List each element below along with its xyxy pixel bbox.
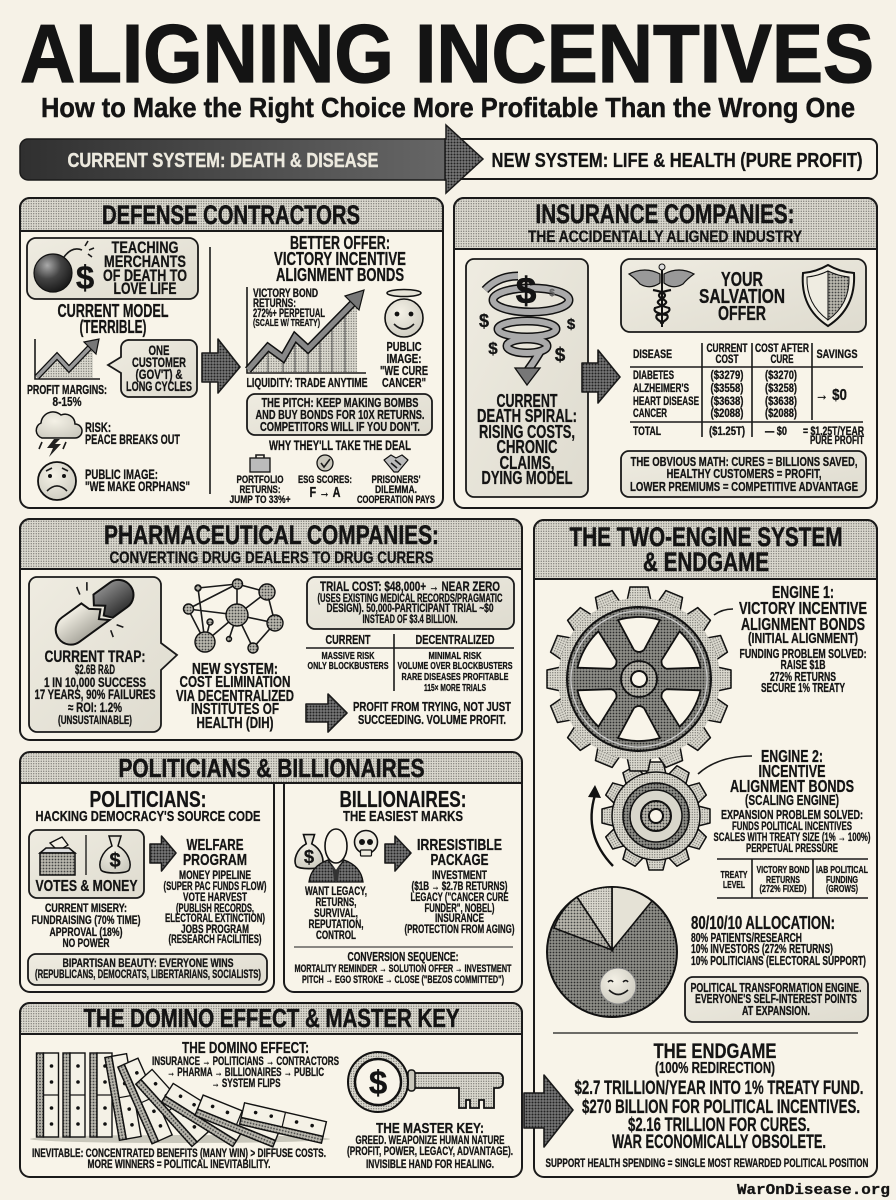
table: disease cost savings: ($3638)	[765, 396, 797, 408]
panel: your salvation offer: YOUR	[721, 269, 763, 291]
callout: trial cost: (USES EXISTING MEDICAL RECORDS/PRAGMATIC	[318, 593, 502, 605]
icon: master key	[348, 1052, 503, 1112]
icon: engine 2 gear	[602, 762, 710, 870]
text: engine 1	[714, 582, 867, 695]
chart: 80/10/10 allocation pie	[547, 887, 677, 1017]
icon: halo smiley with public image	[380, 290, 428, 390]
text: irresistible package: INSURANCE	[435, 913, 484, 925]
table: disease cost savings: ($3270)	[765, 370, 797, 382]
table: disease cost savings: COST	[716, 354, 738, 366]
heading: better offer	[274, 233, 406, 285]
callout: the obvious math	[621, 451, 866, 497]
text: irresistible package: ($1B → $2.7B RETURNS)	[412, 881, 508, 893]
text: master key	[347, 1120, 513, 1171]
reason: esg scores	[298, 455, 352, 501]
heading: billionaires: THE EASIEST MARKS	[343, 808, 463, 825]
table: current vs decentralized: 115× MORE TRIALS	[424, 682, 486, 694]
icon box: votes and money	[29, 830, 144, 898]
icon: halo smiley with public image: "WE CURE	[380, 363, 428, 378]
arrow: politicians	[150, 836, 176, 871]
text: the endgame	[546, 1040, 868, 1170]
text: inevitable	[32, 1146, 326, 1171]
panel: current trap	[29, 561, 177, 732]
callout: one customer: (GOV'T) &	[136, 367, 183, 382]
text: master key: GREED. WEAPONIZE HUMAN NATURE	[356, 1133, 504, 1147]
arrow: defense	[202, 339, 240, 393]
table: current vs decentralized: DECENTRALIZED	[416, 632, 494, 647]
text: conversion sequence: PITCH → EGO STROKE → CLOSE ("BEZOS COMMITTED")	[302, 974, 504, 986]
text: irresistible package: PACKAGE	[430, 852, 489, 869]
text: welfare program: PROGRAM	[183, 852, 247, 869]
callout: political transformation engine	[685, 977, 868, 1022]
text: conversion sequence	[294, 950, 512, 986]
callout: political transformation engine: AT EXPANSION.	[742, 1004, 810, 1018]
heading: two-engine system	[534, 520, 877, 579]
table: current vs decentralized	[306, 632, 514, 694]
heading: current model	[58, 301, 168, 337]
text: engine 2: INCENTIVE	[758, 761, 826, 781]
text: domino effect: INSURANCE → POLITICIANS → CONTRACTORS	[152, 1056, 339, 1068]
icon: money spiral: $	[479, 311, 489, 331]
table: disease cost savings: TOTAL	[633, 426, 661, 438]
panel: domino effect and master key	[20, 1003, 522, 1177]
text: profit from trying	[353, 699, 511, 727]
text: master key: THE MASTER KEY:	[376, 1120, 484, 1137]
heading: better offer: VICTORY INCENTIVE	[274, 249, 406, 269]
table: disease cost savings: ($3558)	[710, 383, 744, 395]
table: treaty level: RETURNS	[766, 875, 800, 886]
text: welfare program: JOBS PROGRAM	[181, 924, 249, 936]
reason: esg scores: ESG SCORES:	[298, 474, 352, 486]
heading: pharmaceutical companies: PHARMACEUTICAL COMPANIES:	[104, 520, 439, 550]
table: treaty level: FUNDING	[826, 875, 858, 886]
heading: politicians: HACKING DEMOCRACY'S SOURCE CODE	[36, 808, 260, 825]
callout: trial cost: TRIAL COST: $48,000+ → NEAR ZERO	[320, 578, 500, 594]
table: disease cost savings: ($3258)	[765, 383, 797, 395]
icon: broken pill	[40, 561, 149, 664]
text: irresistible package: (PROTECTION FROM AGING)	[404, 924, 515, 936]
text: new system	[176, 661, 294, 732]
panel: insurance companies	[454, 198, 877, 508]
panel: defense contractors	[20, 198, 443, 508]
arrow: billionaires	[385, 836, 411, 871]
table: current vs decentralized: VOLUME OVER BLOCKBUSTERS	[398, 660, 512, 672]
callout: the obvious math: HEALTHY CUSTOMERS = PROFIT,	[666, 466, 822, 481]
table: disease cost savings: CURE	[770, 354, 794, 366]
text: current misery	[32, 901, 140, 950]
panel: current death spiral: RISING COSTS,	[479, 421, 575, 442]
banner: current system to new system	[20, 125, 877, 193]
callout: teaching merchants: MERCHANTS	[104, 253, 186, 271]
text: the endgame: $2.16 TRILLION FOR CURES.	[628, 1115, 810, 1136]
icon: master key: $	[369, 1064, 387, 1101]
icon: money spiral: $	[567, 316, 576, 333]
chart: victory bond returns: RETURNS:	[253, 298, 296, 310]
table: disease cost savings: HEART DISEASE	[633, 396, 699, 408]
text: engine 2: ENGINE 2:	[761, 746, 823, 766]
text: inevitable: INEVITABLE: CONCENTRATED BENEFITS (MANY WIN) > DIFFUSE COSTS.	[32, 1146, 326, 1160]
heading: current model: CURRENT MODEL	[58, 301, 168, 321]
heading: insurance companies: INSURANCE COMPANIES:	[536, 199, 794, 229]
icon: billionaire with money and skull	[295, 829, 378, 882]
text: new system: NEW SYSTEM:	[192, 661, 278, 678]
reason: prisoners' dilemma: PRISONERS'	[372, 474, 421, 486]
icon: sad face with public image: PUBLIC IMAGE:	[85, 467, 158, 482]
text: welfare program: VOTE HARVEST	[183, 892, 247, 904]
panel: current death spiral: CHRONIC	[496, 436, 558, 457]
table: disease cost savings: ($1.25T)	[709, 426, 745, 438]
heading: billionaires	[340, 786, 466, 825]
panel: two-engine system and endgame	[534, 520, 877, 1177]
table: treaty level: VICTORY BOND	[756, 865, 810, 876]
callout: trial cost	[307, 577, 514, 629]
panel: current death spiral: DYING MODEL	[482, 467, 572, 488]
icon: engine 1 gear	[547, 587, 731, 771]
icon: storm cloud with risk	[36, 412, 181, 457]
text: current misery: APPROVAL (18%)	[50, 925, 122, 939]
arrow: pharma	[306, 694, 347, 732]
panel: current trap: (UNSUSTAINABLE)	[58, 713, 132, 727]
text: the endgame: THE ENDGAME	[654, 1040, 776, 1063]
text: 80/10/10 allocation: 10% INVESTORS (272% RETURNS)	[691, 942, 833, 956]
icon box: votes and money: $	[109, 850, 121, 872]
text: billionaire wants: CONTROL	[316, 928, 356, 942]
table: treaty level: TREATY	[720, 870, 748, 881]
panel: current trap: CURRENT TRAP:	[44, 647, 146, 666]
icon: halo smiley with public image: PUBLIC	[386, 339, 422, 354]
banner: current system to new system: CURRENT SYSTEM: DEATH & DISEASE	[68, 150, 378, 172]
text: inevitable: MORE WINNERS = POLITICAL INEVITABILITY.	[88, 1157, 270, 1171]
text: irresistible package	[404, 837, 515, 936]
icon: money spiral: $	[488, 339, 498, 358]
icon: billionaire with money and skull: $	[304, 846, 314, 867]
panel: current death spiral: CLAIMS,	[500, 452, 554, 473]
text: engine 1: 272% RETURNS	[770, 670, 836, 684]
callout: teaching merchants: $	[76, 259, 94, 296]
table: disease cost savings: CURRENT	[706, 343, 748, 355]
reason: esg scores: F → A	[310, 484, 341, 501]
table: current vs decentralized: ONLY BLOCKBUSTERS	[308, 660, 388, 672]
table: treaty level: LEVEL	[723, 880, 745, 891]
text: 80/10/10 allocation	[691, 913, 866, 968]
text: irresistible package: INVESTMENT	[432, 870, 487, 882]
text: engine 1: RAISE $1B	[780, 658, 826, 672]
heading: politicians and billionaires: POLITICIANS & BILLIONAIRES	[118, 753, 424, 783]
icon: storm cloud with risk: PEACE BREAKS OUT	[85, 432, 181, 447]
text: welfare program	[164, 837, 267, 946]
table: disease cost savings: SAVINGS	[816, 349, 858, 361]
table: disease cost savings: — $0	[765, 426, 787, 438]
text: current misery: NO POWER	[62, 936, 110, 950]
icon: money spiral	[479, 270, 576, 385]
text: welfare program: WELFARE	[186, 837, 244, 854]
icon: money spiral: $	[555, 345, 566, 366]
table: current vs decentralized: MINIMAL RISK	[428, 650, 482, 662]
callout: trial cost: INSTEAD OF $3.4 BILLION.	[362, 614, 458, 626]
text: irresistible package: FUNDER", NOBEL)	[424, 903, 495, 915]
table: disease cost savings: ALZHEIMER'S	[633, 383, 689, 395]
text: engine 1: SECURE 1% TREATY	[761, 681, 845, 695]
icon: money spiral: $	[549, 288, 555, 299]
reason: prisoners' dilemma	[357, 455, 435, 506]
callout: bipartisan beauty: (REPUBLICANS, DEMOCRATS, LIBERTARIANS, SOCIALISTS)	[35, 967, 261, 981]
heading: two-engine system: & ENDGAME	[643, 547, 769, 577]
icon: caduceus	[629, 264, 694, 327]
panel: your salvation offer: OFFER	[718, 303, 766, 325]
table: disease cost savings: = $1.25T/YEAR	[803, 426, 865, 438]
callout: teaching merchants: OF DEATH TO	[103, 267, 187, 285]
text: conversion sequence: CONVERSION SEQUENCE:	[348, 950, 458, 964]
table: disease cost savings: ($3279)	[710, 370, 744, 382]
callout: the pitch: COMPETITORS WILL IF YOU DON'T.	[260, 419, 420, 434]
table: treaty level: (272% FIXED)	[760, 884, 806, 895]
text: conversion sequence: MORTALITY REMINDER → SOLUTION OFFER → INVESTMENT	[294, 963, 512, 975]
panel: current trap: 1 IN 10,000 SUCCESS	[44, 675, 146, 690]
panel: politicians and billionaires	[20, 752, 522, 992]
text: master key: INVISIBLE HAND FOR HEALING.	[366, 1157, 494, 1171]
text: billionaire wants	[305, 884, 367, 942]
chart: profit margins: 8-15%	[52, 394, 82, 409]
callout: teaching merchants	[27, 238, 198, 299]
callout: teaching merchants: LOVE LIFE	[114, 280, 176, 298]
icon: sad face with public image: "WE MAKE ORPHANS"	[85, 479, 190, 494]
panel: your salvation offer	[621, 259, 866, 332]
text: the endgame: (100% REDIRECTION)	[655, 1060, 775, 1077]
text: current misery: FUNDRAISING (70% TIME)	[32, 913, 140, 927]
icon: money spiral: $	[516, 270, 537, 311]
text: domino effect: → PHARMA → BILLIONAIRES → PUBLIC	[167, 1067, 324, 1079]
heading: domino effect and master key: THE DOMINO EFFECT & MASTER KEY	[84, 1003, 460, 1033]
table: disease cost savings: CANCER	[633, 408, 667, 420]
text: welfare program: MONEY PIPELINE	[179, 870, 251, 882]
chart: victory bond returns: 272%+ PERPETUAL	[253, 308, 325, 320]
reason: portfolio returns: PORTFOLIO	[236, 474, 284, 486]
callout: trial cost: DESIGN). 50,000-PARTICIPANT TRIAL ~$0	[326, 603, 494, 615]
text: billionaire wants: RETURNS,	[316, 895, 356, 909]
table: disease cost savings: PURE PROFIT	[810, 435, 864, 447]
heading: defense contractors: DEFENSE CONTRACTORS	[102, 200, 360, 230]
text: 80/10/10 allocation: 80/10/10 ALLOCATION:	[691, 913, 835, 933]
table: current vs decentralized: CURRENT	[326, 632, 371, 647]
chart: profit margins: PROFIT MARGINS:	[27, 382, 107, 397]
callout: one customer: ONE	[148, 343, 170, 358]
text: engine 1: ENGINE 1:	[772, 582, 834, 602]
heading: politicians: POLITICIANS:	[90, 786, 206, 812]
text: domino effect	[152, 1040, 339, 1090]
text: irresistible package: LEGACY ("CANCER CURE	[410, 892, 509, 904]
heading: pharmaceutical companies: CONVERTING DRUG DEALERS TO DRUG CURERS	[110, 548, 434, 567]
text: welfare program: (SUPER PAC FUNDS FLOW)	[164, 881, 267, 893]
text: engine 2	[698, 746, 870, 855]
text: welfare program: (PUBLISH RECORDS,	[176, 903, 254, 915]
panel: current trap: 17 YEARS, 90% FAILURES	[34, 687, 156, 702]
table: disease cost savings: DIABETES	[633, 370, 674, 382]
text: profit from trying: PROFIT FROM TRYING, NOT JUST	[353, 699, 511, 714]
callout: one customer	[108, 340, 197, 397]
text: billionaire wants: WANT LEGACY,	[305, 884, 367, 898]
heading: better offer: BETTER OFFER:	[290, 233, 390, 253]
reason: prisoners' dilemma: COOPERATION PAYS	[357, 494, 435, 506]
panel: current trap: ≈ ROI: 1.2%	[68, 700, 122, 715]
heading: why they'll take the deal: WHY THEY'LL TAKE THE DEAL	[269, 438, 411, 453]
reason: portfolio returns: JUMP TO 33%+	[230, 494, 290, 506]
heading: pharmaceutical companies	[20, 519, 522, 569]
icon box: votes and money: VOTES & MONEY	[36, 878, 138, 895]
text: domino effect: → SYSTEM FLIPS	[212, 1078, 281, 1090]
text: engine 2: PERPETUAL PRESSURE	[746, 841, 838, 855]
chart: profit margins	[27, 339, 107, 409]
table: current vs decentralized: MASSIVE RISK	[322, 650, 375, 662]
chart: victory bond returns: LIQUIDITY: TRADE ANYTIME	[246, 376, 368, 390]
panel: current death spiral: CURRENT	[496, 390, 558, 411]
callout: the pitch	[247, 394, 432, 435]
text: domino effect: THE DOMINO EFFECT:	[182, 1040, 309, 1057]
arrow: into endgame	[524, 1075, 573, 1147]
table: disease cost savings: ($2088)	[765, 408, 797, 420]
reason: prisoners' dilemma: DILEMMA.	[375, 484, 417, 496]
panel: pharmaceutical companies	[20, 519, 522, 740]
callout: one customer: CUSTOMER	[132, 355, 186, 370]
reason: portfolio returns: RETURNS:	[240, 484, 280, 496]
reason: portfolio returns	[230, 455, 290, 506]
text: current misery: CURRENT MISERY:	[45, 901, 127, 915]
table: treaty level: (GROWS)	[826, 884, 858, 895]
chart: victory bond returns: (SCALE W/ TREATY)	[253, 318, 320, 329]
text: engine 2: (SCALING ENGINE)	[745, 792, 839, 809]
text: welfare program: ELECTORAL EXTINCTION)	[165, 913, 265, 925]
arrow: insurance	[582, 350, 620, 403]
panel: current death spiral	[466, 259, 588, 497]
heading: billionaires: BILLIONAIRES:	[340, 786, 466, 812]
table: disease cost savings: ($3638)	[710, 396, 744, 408]
table: disease cost savings: COST AFTER	[755, 343, 810, 355]
icon: shield	[803, 265, 854, 326]
table: disease cost savings	[630, 343, 865, 447]
text: new system: COST ELIMINATION	[180, 674, 290, 691]
icon: storm cloud with risk: RISK:	[85, 420, 111, 435]
chart: victory bond returns	[246, 287, 368, 390]
heading: insurance companies	[454, 198, 877, 249]
icon: falling dominoes	[30, 1053, 330, 1147]
icon: sad face with public image	[38, 462, 190, 500]
icon: halo smiley with public image: CANCER"	[382, 375, 426, 390]
callout: bipartisan beauty: BIPARTISAN BEAUTY: EVERYONE WINS	[62, 956, 234, 970]
text: billionaire wants: REPUTATION,	[308, 917, 364, 931]
heading: politicians	[36, 786, 260, 825]
heading: insurance companies: THE ACCIDENTALLY ALIGNED INDUSTRY	[528, 227, 803, 246]
text: new system: HEALTH (DIH)	[196, 715, 274, 732]
callout: one customer: LONG CYCLES	[126, 379, 192, 394]
text: 80/10/10 allocation: 80% PATIENTS/RESEARCH	[691, 931, 802, 945]
chart: victory bond returns: VICTORY BOND	[253, 288, 318, 300]
panel: current death spiral: DEATH SPIRAL:	[477, 405, 577, 426]
text: irresistible package: IRRESISTIBLE	[417, 837, 502, 854]
callout: the pitch: THE PITCH: KEEP MAKING BOMBS	[262, 395, 419, 410]
callout: teaching merchants: TEACHING	[112, 239, 178, 257]
text: new system: VIA DECENTRALIZED	[176, 688, 294, 705]
heading: better offer: ALIGNMENT BONDS	[276, 265, 404, 285]
icon: network of institutes	[184, 579, 283, 653]
callout: the pitch: AND BUY BONDS FOR 10X RETURNS.	[256, 407, 424, 422]
text: master key: (PROFIT, POWER, LEGACY, ADVANTAGE).	[347, 1144, 513, 1158]
table: treaty level	[717, 859, 868, 898]
arrow: rotation	[588, 785, 613, 866]
callout: bipartisan beauty	[28, 954, 267, 985]
table: disease cost savings: DISEASE	[633, 349, 672, 361]
panel: current trap: $2.6B R&D	[75, 662, 115, 677]
text: profit from trying: SUCCEEDING. VOLUME PROFIT.	[358, 712, 506, 727]
table: treaty level: IAB POLITICAL	[816, 865, 868, 876]
panel: your salvation offer: SALVATION	[699, 286, 785, 308]
table: current vs decentralized: RARE DISEASES PROFITABLE	[402, 671, 508, 683]
text: new system: INSTITUTES OF	[191, 701, 279, 718]
icon: halo smiley with public image: IMAGE:	[386, 351, 422, 366]
text: billionaire wants: SURVIVAL,	[314, 906, 358, 920]
source url: WarOnDisease.org	[737, 1182, 890, 1199]
table: disease cost savings: ($2088)	[710, 408, 744, 420]
table: disease cost savings: → $0	[815, 387, 847, 404]
text: welfare program: (RESEARCH FACILITIES)	[168, 934, 262, 946]
heading: current model: (TERRIBLE)	[80, 317, 146, 337]
